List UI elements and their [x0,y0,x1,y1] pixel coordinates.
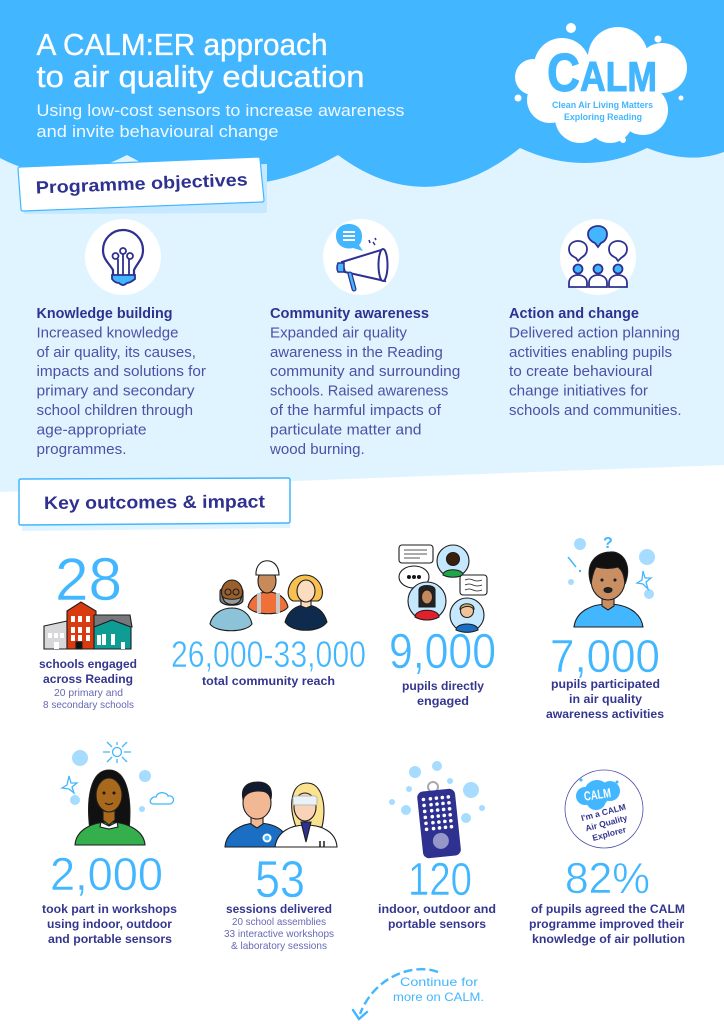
stat: 82% of pupils: programme improved their [529,919,685,931]
stat: 28 schools: 20 primary and [54,687,123,699]
text block: Knowledge building: age-appropriate [36,422,146,438]
text block: Knowledge building: of air quality, its causes, [36,345,196,361]
CALM logo [514,23,687,143]
arrow: continue [353,969,438,1019]
text block: Community awareness: Community awareness [270,306,429,322]
text block: Community awareness: wood burning. [269,442,365,458]
title: to air quality education [36,59,365,94]
text block: Action and change: change initiatives for [509,384,648,400]
stat: 7,000 pupils [546,535,664,721]
CALM logo: Clean Air Living Matters [552,100,653,111]
text block: Community awareness: Expanded air quality [270,326,408,342]
stat: 9,000 pupils: engaged [417,696,469,708]
heading: Key outcomes and impact: Key outcomes & impact [44,491,265,513]
icon: group discussion [560,219,636,295]
badge: CALM Air Quality Explorer: I'm a CALM [580,802,627,823]
icon: portable sensor [389,761,485,859]
text block: Action and change: schools and communities. [509,403,682,419]
text block: Action and change: Delivered action planning [509,326,680,342]
text block: Community awareness: schools. Raised awareness [270,384,448,400]
stat: 82% of pupils [529,770,685,946]
text block: Knowledge building: Increased knowledge [36,326,178,342]
text block: Knowledge building: impacts and solutions for [36,364,206,380]
stat: 82% of pupils: of pupils agreed the CALM [531,904,685,916]
title: A CALM:ER approach [36,27,328,62]
stat: 120 sensors: 120 [408,853,472,905]
header cloud banner [0,0,724,187]
stat: community reach [171,561,366,688]
stat: 53 sessions: 53 [255,851,305,909]
stat: 28 schools [39,546,137,711]
text block: Community awareness [269,306,460,458]
text block: Community awareness: of the harmful impacts of [270,403,442,419]
text block: Community awareness: community and surrounding [270,364,460,380]
stat: 7,000 pupils: 7,000 [550,630,660,682]
stat: 53 sessions: & laboratory sessions [231,940,327,952]
stat: 53 sessions: 20 school assemblies [232,916,326,928]
text block: Community awareness: awareness in the Reading [270,345,443,361]
stat: 53 sessions: sessions delivered [226,904,332,916]
text block: Knowledge building: Knowledge building [36,306,172,322]
stat: 120 sensors: portable sensors [388,919,486,931]
stat: 120 sensors: indoor, outdoor and [378,904,496,916]
icon: thinking boy: ? [603,535,613,552]
stat: 120 sensors [378,761,496,931]
stat: 53 sessions [224,782,337,952]
stat: 2,000 workshops: using indoor, outdoor [47,919,173,931]
CALM logo: Exploring Reading [564,112,642,123]
stat: 9,000 pupils: 9,000 [389,625,496,679]
subtitle: Using low-cost sensors to increase awareness [36,101,404,120]
badge: CALM Air Quality Explorer: Explorer [591,824,628,843]
stat: 7,000 pupils: in air quality [569,694,643,706]
stat: 28 schools: across Reading [43,674,133,686]
icon: school buildings [44,602,132,649]
title [36,27,365,94]
stat: 28 schools: schools engaged [39,659,137,671]
text block: Knowledge building: school children through [36,403,193,419]
stat: community reach: 26,000-33,000 [171,634,366,675]
stat: 82% of pupils: 82% [565,854,650,903]
text block: Knowledge building: programmes. [36,442,127,458]
text block: Action and change: to create behavioural [509,364,652,380]
text block: Knowledge building: primary and secondary [36,384,195,400]
stat: 9,000 pupils [389,545,496,708]
stat: 2,000 workshops [42,742,177,946]
icon: light bulb [85,219,161,295]
text block: Knowledge building [36,306,206,458]
icon: three community members [210,561,327,631]
stat: 7,000 pupils: pupils participated [551,679,660,691]
note: continue for more on CALM: Continue for [400,975,478,989]
light blue background panel [0,140,724,492]
icon: staff and scientist [225,782,337,847]
icon: pupil with hair and weather [62,742,174,845]
icon: pupils in conversation [399,545,487,632]
stat: community reach: total community reach [202,676,335,688]
text block: Community awareness: particulate matter and [270,422,422,438]
text block: Action and change: activities enabling pupils [509,345,672,361]
subtitle [36,101,404,141]
icon: megaphone [323,219,399,295]
stat: 28 schools: 28 [55,546,122,613]
heading: Programme objectives: Programme objectives [35,169,248,197]
subtitle: and invite behavioural change [36,122,278,141]
badge: CALM Air Quality Explorer: Air Quality [584,813,629,833]
CALM logo: CALM [547,43,657,103]
note: continue for more on CALM: more on CALM. [393,990,484,1004]
badge: CALM Air Quality Explorer: CALM [583,785,612,804]
text block: Action and change: Action and change [509,306,639,322]
note: continue for more on CALM [393,975,484,1004]
text block: Action and change [509,306,682,419]
stat: 9,000 pupils: pupils directly [402,681,485,693]
heading: Programme objectives [18,157,267,214]
stat: 53 sessions: 33 interactive workshops [224,928,334,940]
badge: CALM Air Quality Explorer [565,770,643,848]
heading: Key outcomes and impact [19,478,290,531]
icon: thinking boy [568,535,655,627]
stat: 82% of pupils: knowledge of air pollution [532,934,685,946]
stat: 2,000 workshops: took part in workshops [42,904,177,916]
stat: 2,000 workshops: and portable sensors [48,934,172,946]
stat: 2,000 workshops: 2,000 [50,848,163,900]
stat: 7,000 pupils: awareness activities [546,709,664,721]
stat: 28 schools: 8 secondary schools [43,699,134,711]
